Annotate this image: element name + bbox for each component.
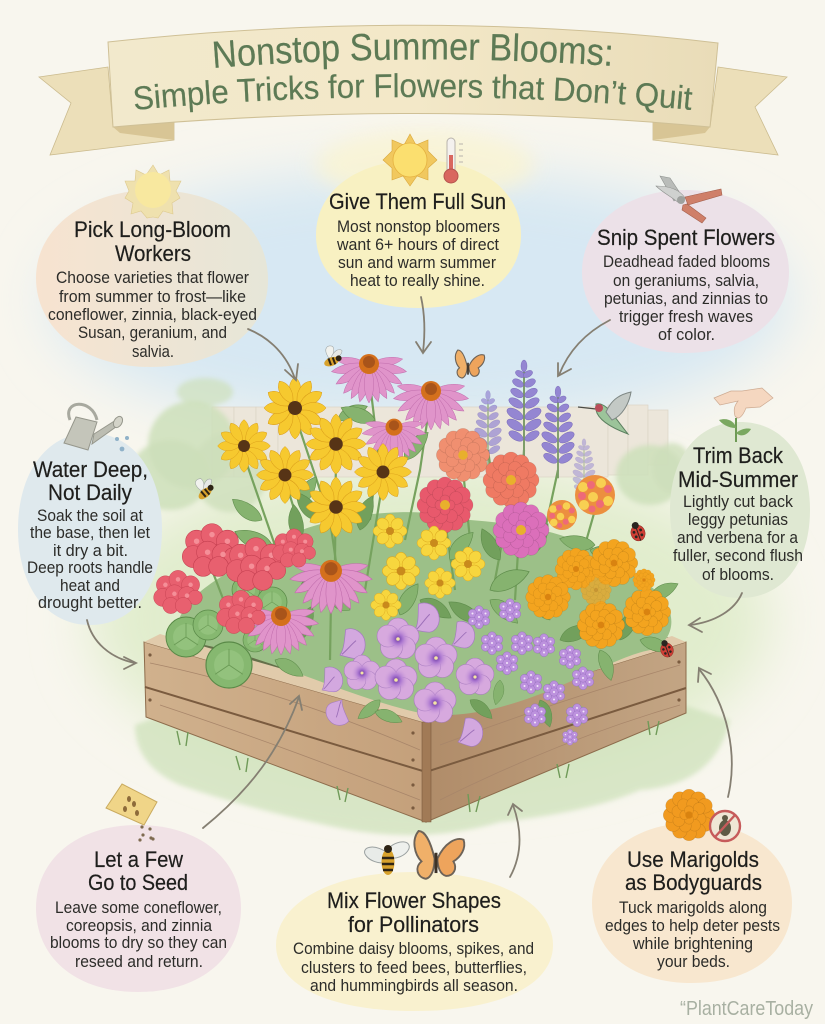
right ribbon tail — [653, 67, 787, 155]
icon: pruning shears — [656, 176, 722, 223]
foliage mass — [166, 375, 681, 729]
text: pick long-bloom workers: salvia. — [132, 343, 174, 361]
panel: give them full sun — [316, 160, 521, 308]
text: let a few go to seed: blooms to dry so they can — [50, 934, 227, 952]
black-eyed susans — [218, 377, 412, 537]
left ribbon tail — [39, 67, 174, 155]
text: use marigolds: while brightening — [632, 935, 753, 953]
icon: butterfly — [414, 831, 464, 879]
icon: bee — [362, 839, 412, 875]
text: give them full sun: Give Them Full Sun — [329, 189, 506, 214]
bee — [192, 475, 217, 502]
title: Simple Tricks for Flowers that Don’t Quit — [134, 73, 692, 113]
text: mix flower shapes: and hummingbirds all season. — [310, 977, 518, 995]
text: snip spent flowers: Deadhead faded blooms — [603, 253, 770, 271]
text: pick long-bloom workers: Susan, geranium, and — [78, 324, 227, 342]
garden fence — [212, 405, 668, 477]
text: give them full sun — [329, 189, 506, 290]
petunias — [314, 598, 494, 750]
text: let a few go to seed: Let a Few — [94, 847, 184, 872]
arrow: pick to flowers — [248, 329, 298, 380]
zinnias — [417, 428, 549, 558]
panel: snip spent flowers — [582, 190, 789, 353]
arrow: marigolds to bed — [698, 668, 732, 797]
text: use marigolds: Use Marigolds — [627, 847, 759, 872]
text: trim back: of blooms. — [702, 566, 774, 584]
stems — [212, 375, 595, 660]
text: give them full sun: sun and warm summer — [338, 254, 496, 272]
ribbon folds — [113, 122, 710, 140]
text: water deep: Deep roots handle — [27, 559, 153, 577]
coneflowers — [243, 354, 469, 655]
text: give them full sun: heat to really shine. — [350, 272, 485, 290]
text: mix flower shapes — [293, 888, 534, 995]
arrow: pollinators to bed — [508, 804, 522, 877]
watercolor sky wash — [50, 130, 790, 430]
text: trim back: Mid-Summer — [678, 467, 798, 492]
panel: use marigolds — [592, 823, 792, 983]
soil and rim — [144, 570, 686, 723]
watermark: “PlantCareToday — [680, 998, 813, 1020]
hummingbird — [578, 392, 631, 434]
arrow: seed to bed — [203, 696, 302, 828]
icon: seed packet — [106, 784, 157, 842]
arrow: sun to flowers — [416, 297, 431, 353]
text: let a few go to seed: Leave some coneflower, — [55, 899, 222, 917]
text: water deep: heat and — [60, 577, 120, 595]
text: mix flower shapes: Combine daisy blooms, spikes, and — [293, 940, 534, 958]
text: use marigolds — [605, 847, 780, 971]
panel: pick long-bloom workers — [36, 190, 268, 367]
text: trim back: fuller, second flush — [673, 547, 803, 565]
icon: marigold — [663, 789, 715, 841]
text: trim back: Lightly cut back — [683, 493, 794, 511]
left face of bed — [144, 642, 426, 822]
text: use marigolds: edges to help deter pests — [605, 917, 780, 935]
panel: water deep — [18, 433, 162, 625]
salvia spikes — [473, 360, 596, 502]
geranium leaves — [166, 576, 287, 688]
text: trim back: leggy petunias — [688, 511, 788, 529]
lantana clusters — [547, 475, 615, 530]
text: snip spent flowers: of color. — [658, 326, 715, 344]
bee — [323, 346, 342, 368]
grass tufts — [177, 721, 659, 812]
panel: trim back — [670, 422, 810, 598]
text: use marigolds: your beds. — [657, 953, 730, 971]
text: snip spent flowers: Snip Spent Flowers — [597, 225, 775, 250]
text: give them full sun: want 6+ hours of direct — [336, 236, 499, 254]
text: pick long-bloom workers: from summer to frost—like — [59, 288, 246, 306]
corner post — [422, 722, 431, 822]
icon: pale sun — [125, 165, 181, 218]
banner ribbon — [39, 25, 787, 155]
text: pick long-bloom workers: Choose varieties that flower — [56, 269, 249, 287]
text: let a few go to seed: coreopsis, and zinnia — [66, 917, 213, 935]
text: trim back: and verbena for a — [677, 529, 799, 547]
text: snip spent flowers — [597, 225, 775, 344]
text: mix flower shapes: Mix Flower Shapes — [327, 888, 501, 913]
text: water deep — [27, 457, 153, 612]
panel: let a few go to seed — [36, 825, 241, 992]
text: use marigolds: Tuck marigolds along — [619, 899, 767, 917]
marigolds — [526, 539, 671, 649]
bed rim — [144, 634, 686, 723]
title: Nonstop Summer Blooms: — [214, 33, 611, 70]
ladybug — [627, 520, 647, 543]
text: pick long-bloom workers: Workers — [115, 241, 191, 266]
text: water deep: the base, then let — [30, 524, 150, 542]
text: let a few go to seed — [50, 847, 227, 971]
text: snip spent flowers: trigger fresh waves — [619, 308, 753, 326]
text: water deep: it dry a bit. — [53, 542, 128, 560]
text: mix flower shapes: clusters to feed bees, butterflies, — [301, 959, 527, 977]
raised wooden bed — [144, 570, 686, 822]
text: trim back: Trim Back — [693, 443, 784, 468]
icon: bright sun — [383, 134, 437, 186]
text: water deep: Not Daily — [48, 480, 133, 505]
coreopsis — [371, 514, 485, 620]
icon: watering can — [64, 404, 129, 451]
plank seams — [145, 687, 686, 772]
text: water deep: Soak the soil at — [37, 507, 143, 525]
text: use marigolds: as Bodyguards — [625, 870, 762, 895]
butterfly — [455, 350, 485, 378]
panel: mix flower shapes — [276, 872, 553, 1011]
text: mix flower shapes: for Pollinators — [348, 912, 479, 937]
icon: no-pest sign — [710, 811, 740, 841]
watercolor lawn wash — [90, 460, 770, 835]
text: snip spent flowers: on geraniums, salvia, — [613, 272, 759, 290]
title — [134, 33, 692, 113]
icon: thermometer — [444, 138, 463, 183]
text: water deep: Water Deep, — [33, 457, 148, 482]
text: let a few go to seed: reseed and return. — [75, 953, 203, 971]
arrow: snip to flowers — [558, 320, 610, 376]
text: pick long-bloom workers — [48, 217, 257, 361]
background shrubs — [130, 378, 692, 512]
text: trim back — [673, 443, 803, 584]
verbena clusters — [468, 599, 594, 745]
text: let a few go to seed: Go to Seed — [88, 870, 188, 895]
right face of bed — [426, 642, 686, 822]
arrow: trim to bed — [689, 593, 742, 632]
icon: hand pinching sprout — [714, 388, 773, 442]
text: snip spent flowers: petunias, and zinnias to — [604, 290, 768, 308]
text: pick long-bloom workers: Pick Long-Bloom — [74, 217, 231, 242]
ribbon body — [108, 25, 718, 127]
ladybug — [658, 638, 675, 659]
arrow: water to bed — [87, 620, 136, 669]
geraniums — [154, 524, 316, 634]
text: give them full sun: Most nonstop bloomers — [337, 218, 500, 236]
screws — [148, 653, 681, 810]
leaves — [228, 400, 681, 729]
text: pick long-bloom workers: coneflower, zinnia, black-eyed — [48, 306, 257, 324]
text: water deep: drought better. — [38, 594, 142, 612]
